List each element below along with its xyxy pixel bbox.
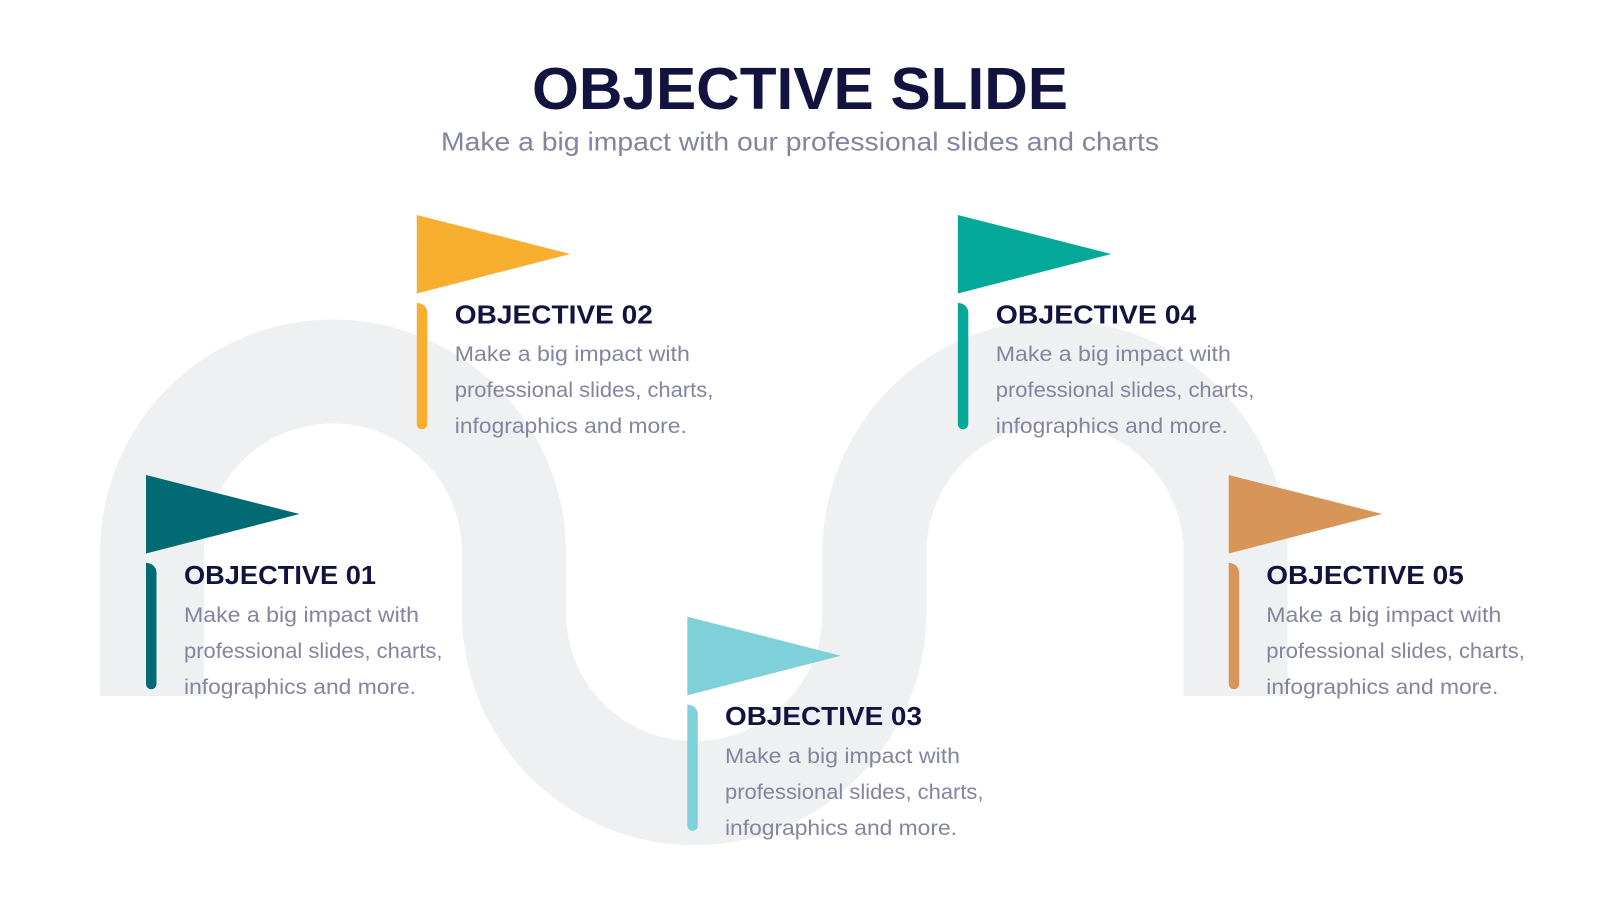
icon: flag 04 [958, 215, 1111, 294]
heading 04: OBJECTIVE 04 [996, 300, 1197, 330]
panel: objective 04 [958, 215, 1254, 438]
description 05 [1266, 604, 1525, 699]
heading 02: OBJECTIVE 02 [455, 300, 653, 330]
subtitle: Make a big impact with our professional slides and charts [441, 126, 1159, 156]
heading 03: OBJECTIVE 03 [725, 701, 922, 731]
description 01: professional slides, charts, [184, 640, 442, 663]
flag pole 03 [687, 705, 698, 831]
description 02 [455, 343, 713, 438]
description 02: infographics and more. [455, 415, 687, 438]
panel: objective 02 [417, 215, 713, 438]
flag pole 04 [958, 303, 968, 429]
flag pole 01 [146, 563, 156, 689]
description 03: Make a big impact with [725, 745, 960, 768]
description 04: Make a big impact with [996, 343, 1231, 366]
description 03: infographics and more. [725, 817, 957, 840]
description 01 [184, 604, 442, 699]
flag pole 05 [1229, 563, 1239, 689]
winding road background [152, 372, 1236, 793]
description 04 [996, 343, 1254, 438]
panel: objective 01 [146, 475, 442, 699]
title: OBJECTIVE SLIDE [532, 55, 1068, 122]
description 05: professional slides, charts, [1266, 640, 1525, 663]
description 03: professional slides, charts, [725, 781, 983, 804]
description 01: Make a big impact with [184, 604, 419, 627]
description 05: Make a big impact with [1266, 604, 1501, 627]
panel: objective 05 [1229, 475, 1525, 699]
description 02: Make a big impact with [455, 343, 690, 366]
description 04: professional slides, charts, [996, 379, 1254, 402]
icon: flag 05 [1229, 475, 1382, 554]
description 04: infographics and more. [996, 415, 1228, 438]
description 03 [725, 745, 984, 840]
description 02: professional slides, charts, [455, 379, 713, 402]
icon: flag 02 [417, 215, 570, 294]
panel: objective 03 [687, 617, 984, 840]
heading 05: OBJECTIVE 05 [1266, 560, 1464, 590]
heading 01: OBJECTIVE 01 [184, 560, 376, 590]
icon: flag 03 [687, 617, 841, 695]
description 05: infographics and more. [1266, 676, 1498, 699]
icon: flag 01 [146, 475, 300, 554]
description 01: infographics and more. [184, 676, 416, 699]
flag pole 02 [417, 303, 427, 429]
